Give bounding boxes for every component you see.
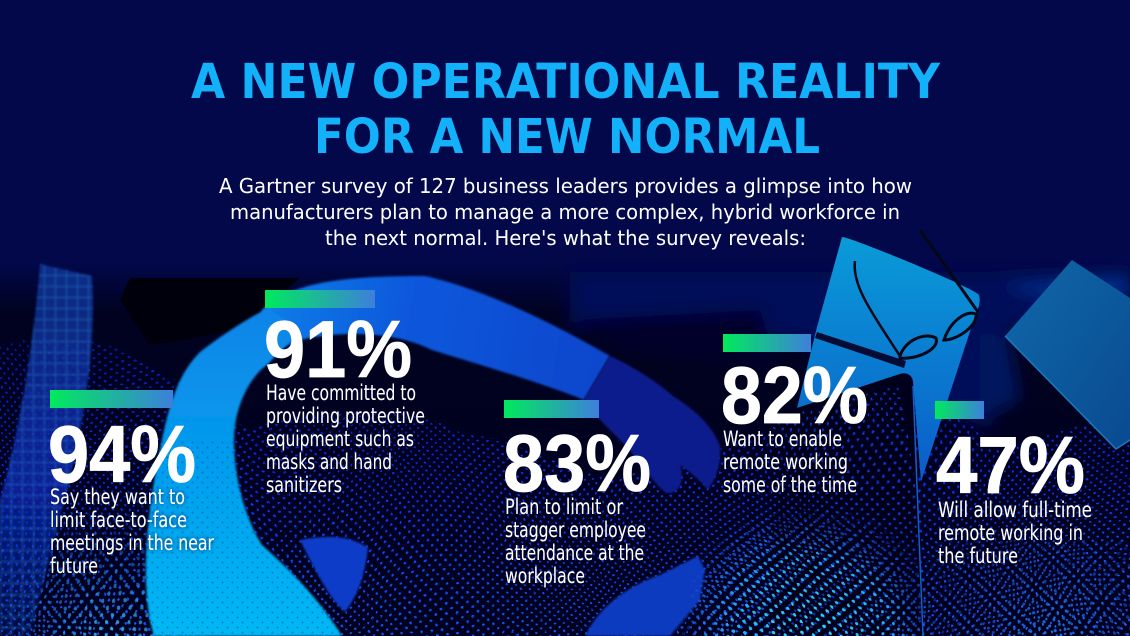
- title: [191, 54, 941, 165]
- mesh roll left: [0, 264, 93, 636]
- stat: 47%: remote working in: [938, 521, 1083, 545]
- stat: 83%: 83%: [503, 419, 651, 509]
- stat: 83%: [503, 400, 651, 588]
- stat: 83%: attendance at the: [505, 541, 644, 565]
- stat: 94%: meetings in the near: [50, 531, 214, 555]
- intro text: [219, 174, 912, 250]
- stat: 82%: 82%: [721, 351, 868, 441]
- stat: 47%: [935, 401, 1092, 568]
- tablet dots: [772, 385, 922, 636]
- stat: 83%: workplace: [505, 564, 585, 588]
- stat: 94%: 94%: [48, 410, 196, 500]
- stat: 91%: Have committed to: [266, 381, 416, 405]
- stat: 83%: stagger employee: [505, 518, 646, 542]
- stat: 82%: Want to enable: [723, 427, 842, 451]
- notebook: [797, 230, 980, 482]
- tablet: [772, 374, 923, 636]
- title: A NEW OPERATIONAL REALITY: [191, 54, 941, 110]
- stat: 94%: [48, 390, 214, 578]
- pen: [815, 332, 906, 368]
- stat: 91%: 91%: [264, 305, 412, 395]
- brighter dots right: [974, 520, 1126, 636]
- stat: 94%: Say they want to: [50, 485, 185, 509]
- desk texture right: [570, 272, 1130, 430]
- stat: 91%: sanitizers: [266, 473, 342, 497]
- dark lower photo background: [0, 262, 1130, 636]
- stat: 83%: Plan to limit or: [505, 495, 623, 519]
- stat: 91%: equipment such as: [266, 427, 414, 451]
- stat: 47%: the future: [938, 544, 1018, 568]
- stat: 47%: Will allow full-time: [938, 498, 1092, 522]
- intro text: the next normal. Here's what the survey reveals:: [325, 226, 806, 250]
- stat: 82%: [721, 334, 868, 497]
- torso: [146, 308, 342, 636]
- intro text: manufacturers plan to manage a more complex, hybrid workforce in: [230, 200, 900, 224]
- cyan dots lower left: [0, 480, 260, 636]
- lower hand on desk: [585, 556, 705, 636]
- stat: 47%: 47%: [936, 421, 1085, 511]
- shirt dot overlay: [146, 440, 342, 636]
- cyan dots lower centre: [670, 500, 940, 636]
- arm and torso: [146, 276, 610, 636]
- blue dots: [0, 338, 1130, 636]
- stat: 94%: future: [50, 554, 98, 578]
- glasses: [855, 230, 978, 358]
- blue dots lower right: [920, 540, 1130, 636]
- wavy dot field: [0, 338, 1130, 636]
- stat: 91%: masks and hand: [266, 450, 392, 474]
- large cyan dots: [0, 498, 1130, 636]
- intro text: A Gartner survey of 127 business leaders provides a glimpse into how: [219, 174, 912, 198]
- far arm: [262, 276, 610, 400]
- stat: 82%: remote working: [723, 450, 848, 474]
- stat: 91%: providing protective: [266, 404, 425, 428]
- book: [1005, 260, 1130, 449]
- stat: 82%: some of the time: [723, 473, 857, 497]
- stat: 94%: limit face-to-face: [50, 508, 187, 532]
- stat: 91%: [264, 290, 425, 497]
- tablet cyan dots: [690, 500, 922, 636]
- right hand on desk: [584, 356, 720, 493]
- title: FOR A NEW NORMAL: [314, 109, 820, 165]
- tablet edge: [913, 386, 923, 636]
- desk shadow left: [120, 278, 300, 345]
- shirt fold: [300, 537, 368, 612]
